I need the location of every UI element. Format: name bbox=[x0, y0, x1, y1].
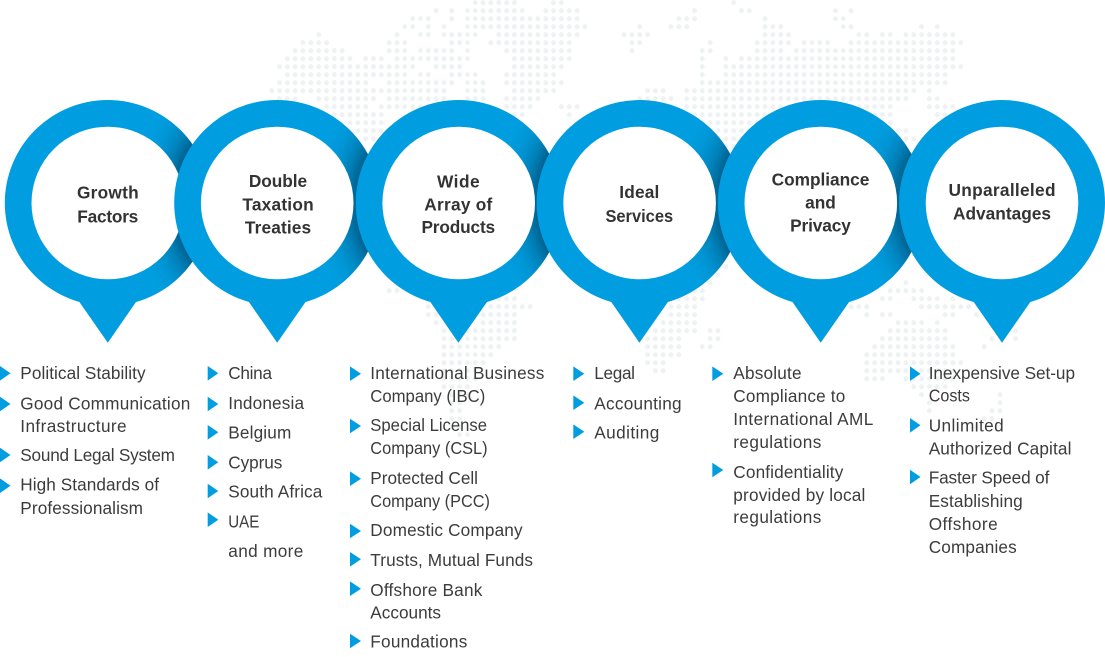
pin: Ideal Services bbox=[536, 100, 730, 343]
pin: Double Taxation Treaties bbox=[174, 100, 368, 343]
list: ideal services: Auditing bbox=[594, 422, 659, 442]
list: growth factors: Political Stability bbox=[20, 363, 146, 383]
pin: Compliance and Privacy: Compliance bbox=[772, 169, 870, 189]
list: product types: Company (IBC) bbox=[370, 386, 485, 406]
pin: Wide Array of Products: Products bbox=[421, 217, 495, 237]
pin: Ideal Services: Services bbox=[605, 206, 673, 226]
pin: Growth Factors: Growth bbox=[77, 182, 139, 202]
list: compliance and privacy: regulations bbox=[733, 507, 821, 527]
list: ideal services: Legal bbox=[594, 363, 635, 383]
pin: Unparalleled Advantages bbox=[899, 100, 1105, 343]
list: unparalleled advantages: Companies bbox=[929, 537, 1017, 557]
list: product types: Company (PCC) bbox=[370, 491, 490, 511]
list: unparalleled advantages: Authorized Capital bbox=[929, 438, 1071, 458]
list: unparalleled advantages: Unlimited bbox=[929, 416, 1004, 436]
list: product types: Trusts, Mutual Funds bbox=[370, 550, 533, 570]
list: double taxation treaty countries: and more bbox=[228, 541, 303, 561]
pin: Double Taxation Treaties: Taxation bbox=[242, 194, 314, 214]
list: product types: Accounts bbox=[370, 602, 441, 622]
list: ideal services: Accounting bbox=[594, 393, 682, 413]
pin: Unparalleled Advantages: Unparalleled bbox=[948, 180, 1056, 200]
list: unparalleled advantages: Costs bbox=[929, 386, 970, 406]
pin: Growth Factors: Factors bbox=[77, 206, 138, 226]
list: double taxation treaty countries: China bbox=[228, 363, 272, 383]
list: unparalleled advantages: Establishing bbox=[929, 491, 1023, 511]
list: growth factors bbox=[0, 363, 190, 518]
list: growth factors: Sound Legal System bbox=[20, 445, 175, 465]
list: ideal services bbox=[573, 363, 682, 442]
list: unparalleled advantages: Inexpensive Set-up bbox=[929, 363, 1075, 383]
list: compliance and privacy: Compliance to bbox=[733, 386, 845, 406]
list: double taxation treaty countries: Belgium bbox=[228, 422, 291, 442]
pin: Unparalleled Advantages: Advantages bbox=[953, 203, 1051, 223]
pin: Double Taxation Treaties: Double bbox=[249, 171, 308, 191]
list: compliance and privacy: International AML bbox=[733, 409, 873, 429]
list: growth factors: Professionalism bbox=[20, 498, 143, 518]
list: unparalleled advantages bbox=[910, 363, 1075, 557]
list: double taxation treaty countries: Cyprus bbox=[228, 452, 282, 472]
pin: Wide Array of Products bbox=[356, 100, 550, 343]
list: product types: Protected Cell bbox=[370, 468, 478, 488]
list: double taxation treaty countries: UAE bbox=[228, 511, 259, 531]
pin: Compliance and Privacy: Privacy bbox=[790, 215, 851, 235]
pin: Ideal Services: Ideal bbox=[619, 182, 659, 202]
list: growth factors: Infrastructure bbox=[20, 416, 127, 436]
pin: Compliance and Privacy bbox=[718, 100, 912, 343]
list: growth factors: Good Communication bbox=[20, 393, 190, 413]
list: compliance and privacy bbox=[712, 363, 873, 527]
pin: Wide Array of Products: Array of bbox=[424, 195, 493, 215]
list: growth factors: High Standards of bbox=[20, 475, 159, 495]
list: compliance and privacy: Confidentiality bbox=[733, 462, 844, 482]
pin: Double Taxation Treaties: Treaties bbox=[245, 217, 311, 237]
pin: Compliance and Privacy: and bbox=[805, 192, 836, 212]
list: compliance and privacy: provided by local bbox=[733, 485, 865, 505]
list: product types bbox=[350, 363, 544, 652]
list: product types: Domestic Company bbox=[370, 520, 523, 540]
list: double taxation treaty countries bbox=[208, 363, 323, 561]
list: compliance and privacy: regulations bbox=[733, 432, 821, 452]
list: product types: Offshore Bank bbox=[370, 580, 483, 600]
list: double taxation treaty countries: South Africa bbox=[228, 482, 323, 502]
dotted world map background bbox=[272, 3, 1016, 435]
list: unparalleled advantages: Faster Speed of bbox=[929, 468, 1050, 488]
list: product types: Company (CSL) bbox=[370, 438, 488, 458]
list: unparalleled advantages: Offshore bbox=[929, 514, 998, 534]
list: double taxation treaty countries: Indonesia bbox=[228, 393, 304, 413]
list: product types: Foundations bbox=[370, 632, 467, 652]
pin: Wide Array of Products: Wide bbox=[437, 171, 480, 191]
list: product types: Special License bbox=[370, 415, 487, 435]
list: compliance and privacy: Absolute bbox=[733, 363, 802, 383]
pin: Growth Factors bbox=[4, 100, 192, 343]
list: product types: International Business bbox=[370, 363, 544, 383]
